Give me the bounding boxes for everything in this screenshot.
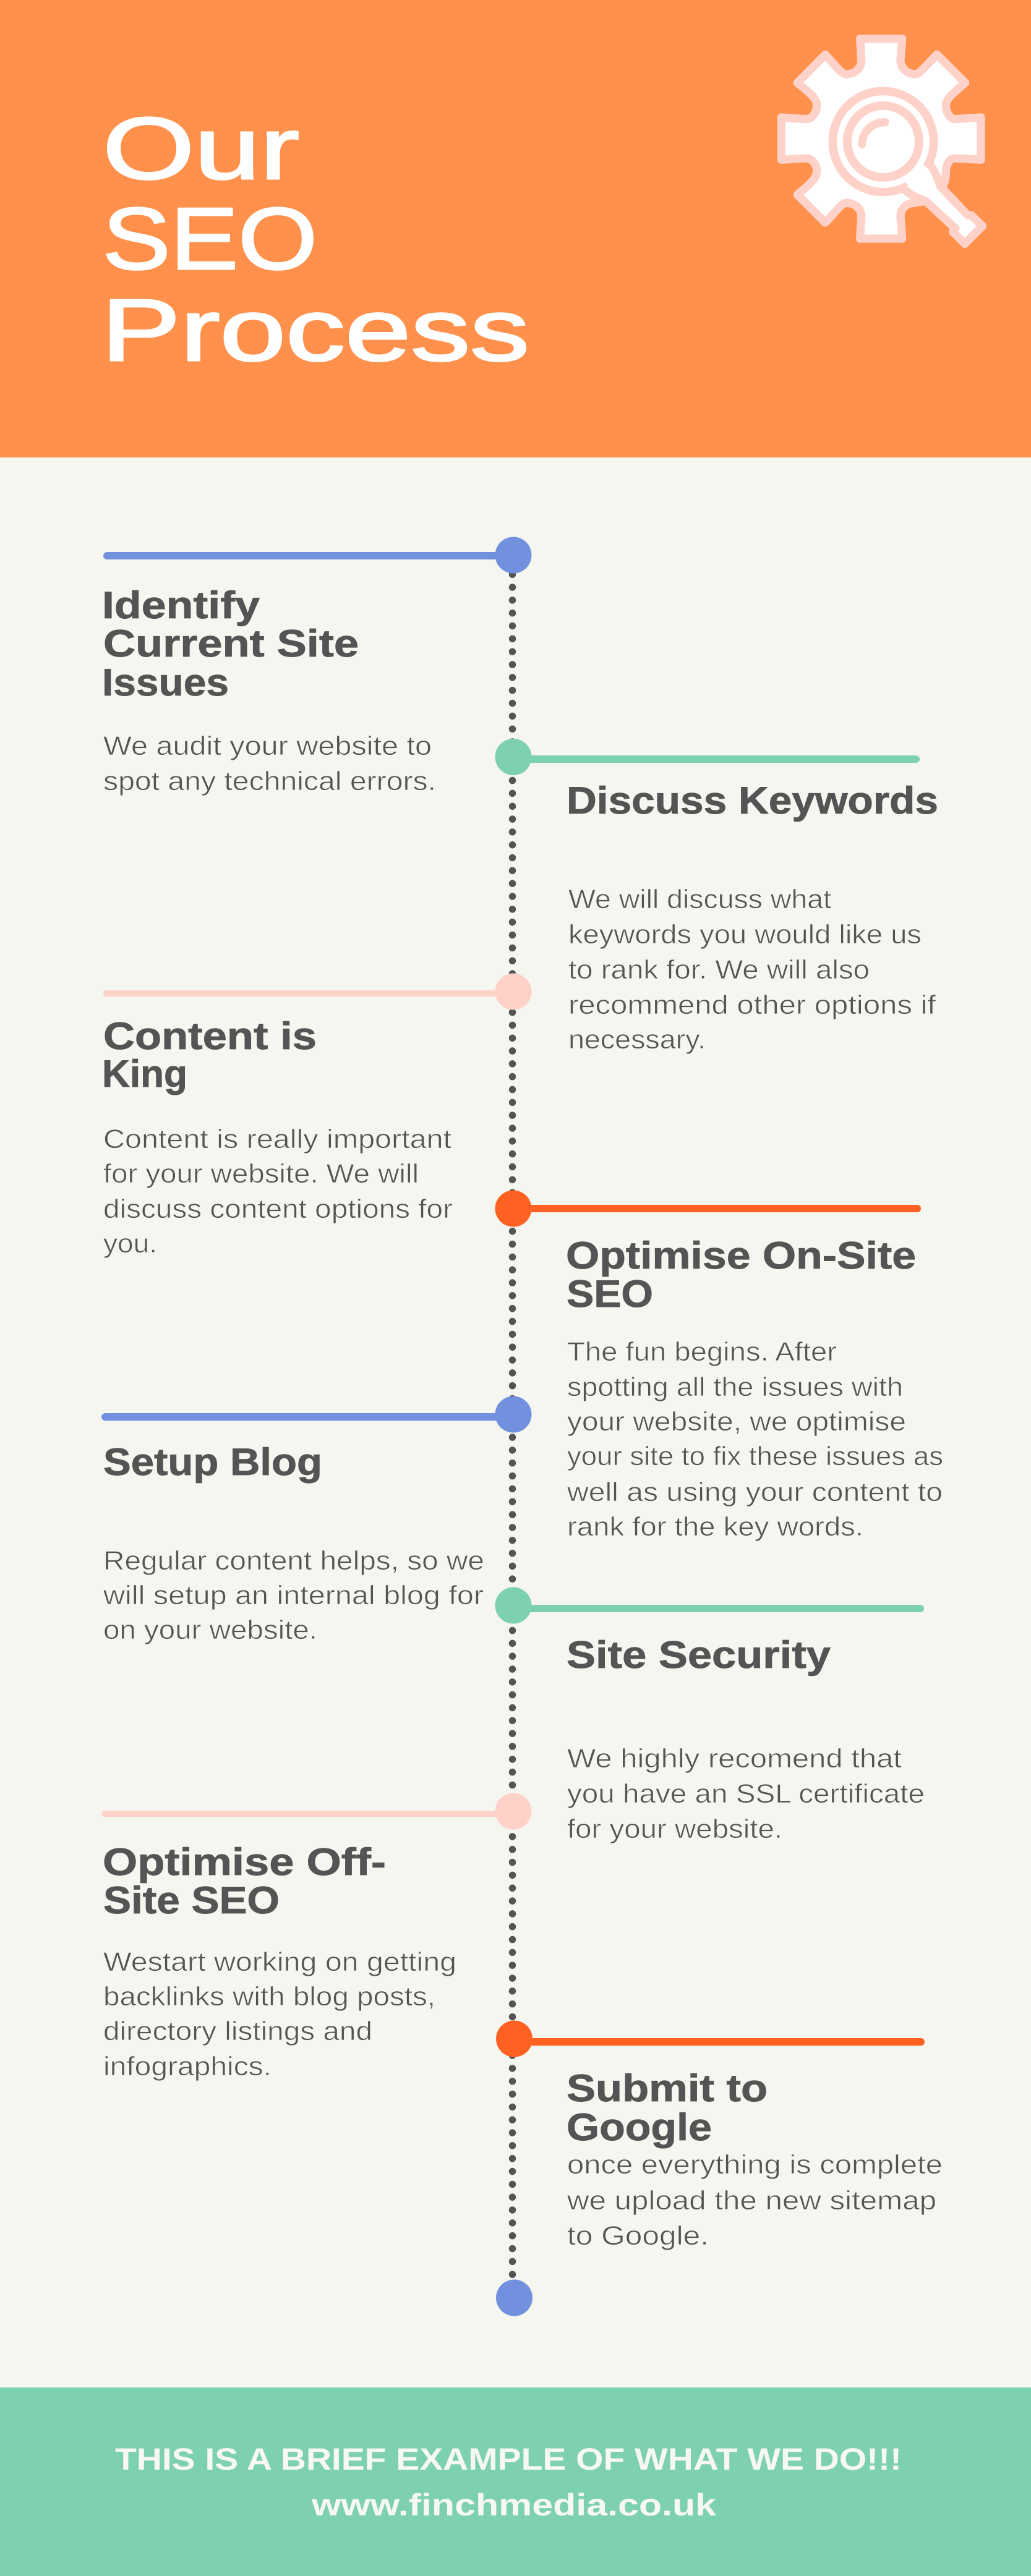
timeline dotted spine (509, 574, 516, 2276)
connector and node (495, 1588, 924, 1623)
header banner (0, 0, 1031, 457)
step 5: setup blog (101, 1396, 532, 1645)
step 8: submit to google (496, 2020, 943, 2251)
heading (103, 1841, 386, 1922)
text: for your website. (567, 1814, 782, 1844)
heading (567, 2067, 768, 2149)
footer tagline: THIS IS A BRIEF EXAMPLE OF WHAT WE DO!!! (115, 2442, 902, 2476)
heading (102, 584, 359, 704)
heading: Site Security (567, 1634, 831, 1677)
text (103, 1124, 453, 1259)
heading: Discuss Keywords (567, 780, 938, 822)
text: necessary. (568, 1025, 706, 1055)
step 6: site security (495, 1588, 925, 1844)
text (567, 1744, 925, 1844)
step 2: discuss keywords (495, 739, 938, 1055)
title: Our (103, 100, 299, 198)
text: spot any technical errors. (103, 767, 436, 796)
title: Process (101, 281, 529, 380)
text: Regular content helps, so we (103, 1546, 484, 1576)
text: discuss content options for (103, 1194, 453, 1224)
text: Westart working on getting (103, 1947, 456, 1977)
heading: Identify (102, 584, 260, 627)
step 4: optimise on-site seo (495, 1191, 943, 1542)
text (103, 1947, 456, 2081)
heading: Content is (103, 1015, 317, 1058)
heading: Issues (102, 661, 229, 704)
text: backlinks with blog posts, (103, 1982, 435, 2012)
connector and node (103, 973, 532, 1010)
connector and node (103, 537, 532, 574)
icon: gear with magnifying glass (781, 39, 982, 244)
heading (566, 1235, 916, 1316)
text: Content is really important (103, 1124, 451, 1154)
text (103, 731, 436, 796)
text: for your website. We will (103, 1159, 419, 1189)
heading: SEO (567, 1273, 653, 1316)
text: keywords you would like us (568, 920, 922, 950)
heading (102, 1015, 317, 1095)
text: to rank for. We will also (568, 955, 870, 985)
step 7: optimise off-site seo (101, 1793, 532, 2081)
text: recommend other options if (568, 990, 936, 1020)
text: once everything is complete (567, 2150, 943, 2180)
connector and node (101, 1396, 532, 1433)
text: you. (103, 1229, 157, 1259)
text: We highly recomend that (567, 1744, 902, 1774)
text: infographics. (103, 2052, 272, 2081)
text: well as using your content to (567, 1477, 943, 1507)
text: we upload the new sitemap (567, 2186, 936, 2216)
text: spotting all the issues with (567, 1372, 903, 1402)
footer website: www.finchmedia.co.uk (311, 2488, 716, 2522)
step 3: content is king (102, 973, 532, 1259)
text: on your website. (103, 1615, 317, 1645)
text: directory listings and (103, 2017, 372, 2046)
footer banner (0, 2387, 1031, 2576)
text (567, 2150, 943, 2251)
heading: Site SEO (103, 1879, 280, 1922)
title (101, 100, 529, 380)
heading: Google (567, 2106, 712, 2149)
text: We will discuss what (568, 885, 831, 914)
connector and node (101, 1793, 532, 1830)
timeline end node (496, 2280, 533, 2316)
text (568, 885, 936, 1055)
connector and node (496, 2020, 925, 2057)
heading: King (102, 1053, 187, 1095)
connector and node (495, 1191, 921, 1226)
text: your website, we optimise (567, 1407, 906, 1437)
heading: Submit to (567, 2067, 768, 2110)
text: The fun begins. After (567, 1337, 837, 1367)
title: SEO (103, 190, 317, 288)
heading: Optimise On-Site (566, 1235, 916, 1277)
text: to Google. (567, 2221, 709, 2251)
heading: Optimise Off- (103, 1841, 386, 1884)
heading: Current Site (103, 623, 359, 665)
connector and node (495, 739, 920, 775)
text: will setup an internal blog for (103, 1581, 484, 1610)
heading: Setup Blog (103, 1441, 322, 1484)
text: We audit your website to (103, 731, 432, 761)
text (103, 1546, 484, 1645)
text: rank for the key words. (567, 1512, 863, 1542)
text: you have an SSL certificate (567, 1779, 925, 1809)
step 1: identify current site issues (102, 537, 532, 796)
text (567, 1337, 943, 1542)
text: your site to fix these issues as (567, 1442, 943, 1471)
